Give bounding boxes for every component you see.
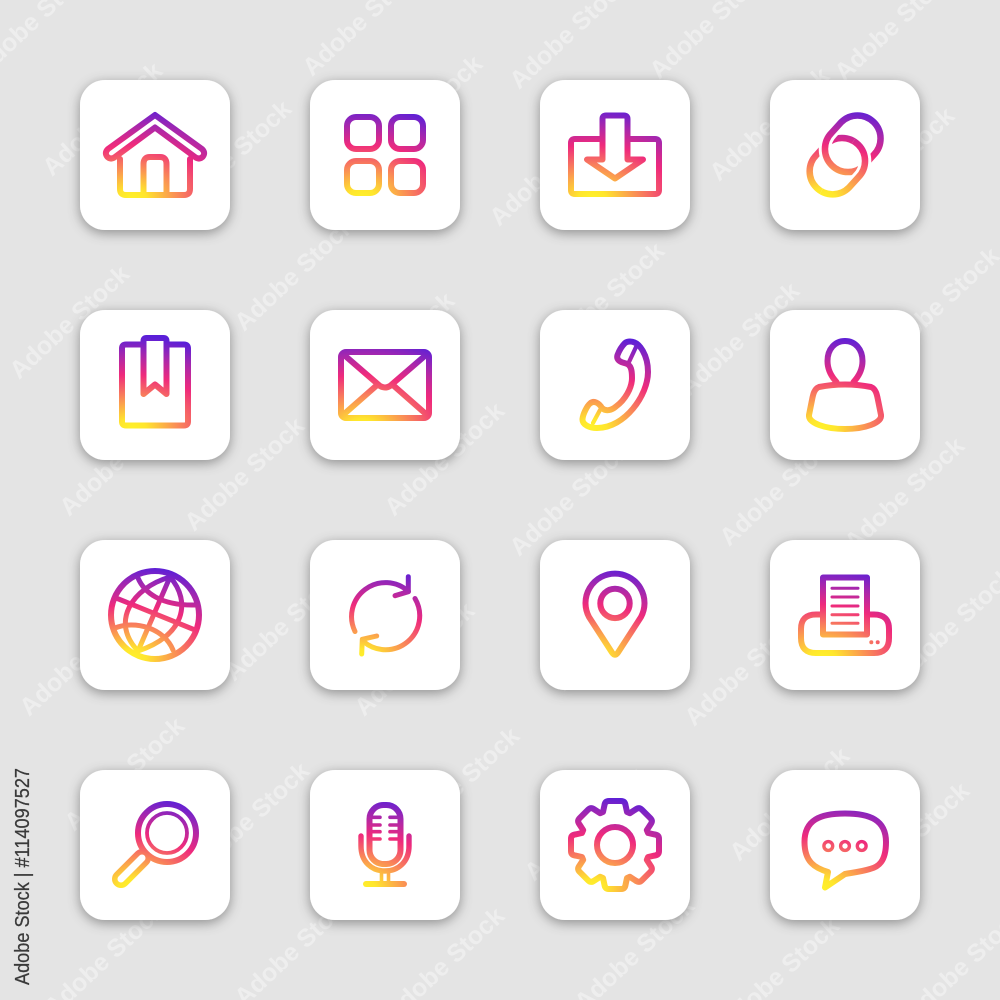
panel: web [80, 540, 230, 690]
icon: speech bubble [804, 814, 886, 888]
watermark layer: Adobe Stock [37, 57, 168, 181]
panel: grid [310, 80, 460, 230]
panel: settings [540, 770, 690, 920]
watermark layer: Adobe Stock [59, 712, 190, 836]
icon: envelope [341, 352, 429, 418]
watermark layer: Adobe Stock [394, 722, 525, 846]
watermark layer: Adobe Stock [166, 95, 297, 219]
watermark layer: Adobe Stock [519, 762, 650, 886]
watermark layer: Adobe Stock [329, 287, 460, 411]
watermark layer: Adobe Stock [539, 237, 670, 361]
panel: download [540, 80, 690, 230]
panel: search [80, 770, 230, 920]
watermark layer: Adobe Stock [704, 62, 835, 186]
watermark layer: Adobe Stock [839, 432, 970, 556]
watermark layer: Adobe Stock [829, 102, 960, 226]
icon: house [106, 115, 204, 195]
panel: chat [770, 770, 920, 920]
icon: four squares [347, 117, 423, 193]
watermark layer: Adobe Stock [549, 572, 680, 696]
watermark layer: Adobe Stock [179, 412, 310, 536]
panel: printer [770, 540, 920, 690]
icon: globe [111, 571, 199, 659]
icon: download tray [571, 116, 659, 194]
watermark layer: Adobe Stock [504, 437, 635, 561]
watermark layer: Adobe Stock [4, 260, 135, 384]
watermark layer: Adobe Stock [229, 212, 360, 336]
icon: circular arrows [352, 577, 420, 654]
watermark layer: Adobe Stock [484, 107, 615, 231]
icon: gear [571, 801, 659, 889]
panel: microphone [310, 770, 460, 920]
watermark layer: Adobe Stock [357, 50, 488, 174]
panel: phone [540, 310, 690, 460]
watermark layer: Adobe Stock [14, 597, 145, 721]
watermark layer: Adobe Stock [184, 757, 315, 881]
watermark layer: Adobe Stock [844, 777, 975, 901]
watermark layer: Adobe Stock [714, 427, 845, 551]
panel: bookmark [80, 310, 230, 460]
watermark layer: Adobe Stock [679, 607, 810, 731]
icon: microphone [361, 805, 409, 884]
icon: map pin [586, 574, 644, 655]
watermark layer: Adobe Stock [379, 397, 510, 521]
watermark layer: Adobe Stock [219, 562, 350, 686]
watermark layer: Adobe Stock [724, 742, 855, 866]
stock id text: Adobe Stock | #114097527 [12, 768, 34, 985]
panel: location [540, 540, 690, 690]
panel: user [770, 310, 920, 460]
icon: book with ribbon [122, 338, 188, 426]
panel: home [80, 80, 230, 230]
watermark layer: Adobe Stock [674, 277, 805, 401]
icon: person [809, 341, 881, 429]
panel: mail [310, 310, 460, 460]
watermark layer: Adobe Stock [54, 397, 185, 521]
icon: chain link [810, 115, 881, 194]
icon: handset [582, 342, 648, 428]
icon: printer with page [801, 578, 889, 653]
icon: magnifier [121, 804, 196, 879]
watermark layer: Adobe Stock [349, 597, 480, 721]
panel: refresh [310, 540, 460, 690]
panel: link [770, 80, 920, 230]
